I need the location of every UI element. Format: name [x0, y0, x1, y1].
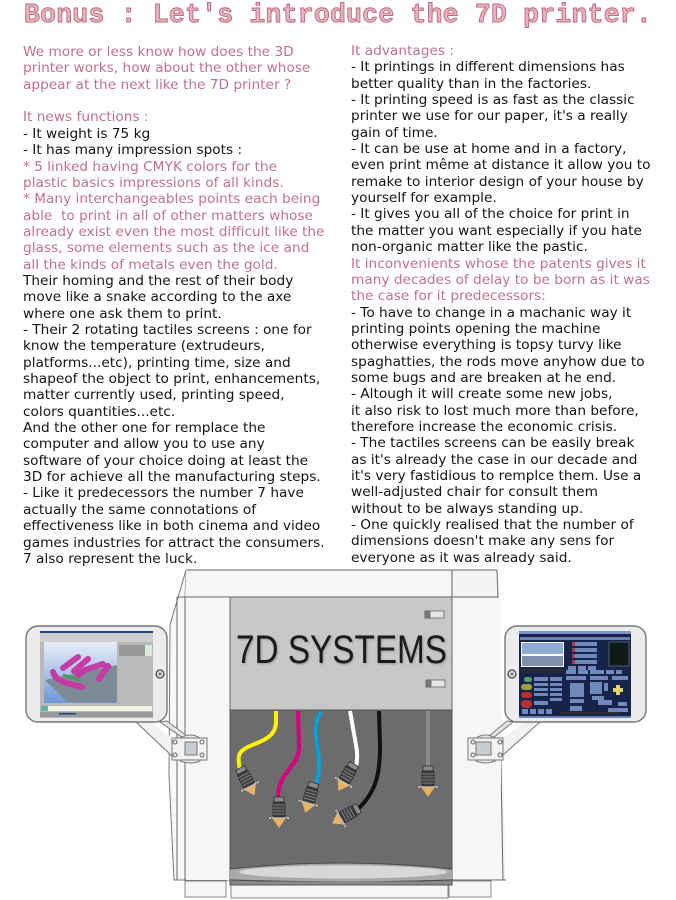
- title: Bonus : Let's introduce the 7D printer.: [24, 0, 652, 30]
- text block: inconvenients list: - To have to change in a machanic way it: [351, 305, 631, 321]
- text block: inconvenients list: it also risk to lost much more than before,: [351, 403, 639, 419]
- text block: inconvenients list: well-adjusted chair for consult them: [351, 484, 598, 500]
- text block: inconvenients list: it's very fastidious to remplce them. Use a: [351, 468, 641, 484]
- right touch screen tablet: [505, 626, 646, 722]
- filament: magenta: [269, 711, 299, 828]
- text block: weight and spots: - It has many impression spots :: [23, 142, 242, 158]
- text block: inconvenients list: [351, 305, 645, 566]
- text block: inconvenients list: - Altough it will create some new jobs,: [351, 386, 612, 402]
- text block: impression spots detail: * 5 linked having CMYK colors for the: [23, 158, 277, 174]
- right arm and bracket: [468, 721, 540, 763]
- text block: impression spots detail: plastic basics impressions of all kinds.: [23, 175, 284, 191]
- printer feet: [185, 881, 491, 898]
- text block: impression spots detail: able to print in all of other matters whose: [23, 208, 313, 224]
- text block: inconvenients list: - One quickly realised that the number of: [351, 517, 634, 533]
- text block: inconvenients list: therefore increase the economic crisis.: [351, 419, 617, 435]
- text block: advantages list: [351, 59, 650, 255]
- text block: functions list: move like a snake according to the axe: [23, 289, 291, 305]
- text block: inconvenients heading: It inconvenients whose the patents gives it: [351, 256, 646, 272]
- text block: advantages list: printer we use for our paper, it's a really: [351, 108, 628, 124]
- text block: functions list: And the other one for remplace the: [23, 420, 265, 436]
- text block: impression spots detail: glass, some elements such as the ice and: [23, 240, 309, 256]
- filament: black: [327, 711, 380, 833]
- text block: advantages list: - It can be use at home and in a factory,: [351, 141, 627, 157]
- text block: intro question: appear at the next like the 7D printer ?: [23, 77, 291, 93]
- text block: advantages list: the matter you want especially if you hate: [351, 223, 642, 239]
- text block: inconvenients list: spaghatties, the rods move anyhow due to: [351, 354, 645, 370]
- filament: cyan: [295, 711, 324, 816]
- panel slots: [425, 611, 445, 687]
- printer body: [169, 570, 506, 898]
- text block: weight and spots: [23, 126, 242, 158]
- text block: functions list: where one ask them to print.: [23, 306, 222, 322]
- text block: inconvenients heading: many decades of delay to be born as it was: [351, 272, 650, 288]
- filament: yellow: [231, 711, 276, 800]
- text block: functions list: - Like it predecessors the number 7 have: [23, 485, 304, 501]
- logo text: 7D SYSTEMS: [236, 628, 447, 672]
- text block: functions list: platforms...etc), printing time, size and: [23, 355, 291, 371]
- text block: functions list: colors quantities...etc.: [23, 404, 175, 420]
- text block: advantages list: - It gives you all of the choice for print in: [351, 206, 630, 222]
- text block: advantages list: - It printings in different dimensions has: [351, 59, 625, 75]
- right screen software: [519, 631, 631, 718]
- text block: functions list: 7 also represent the luck.: [23, 551, 197, 567]
- filament: white: [329, 711, 363, 796]
- logo panel: [230, 597, 452, 711]
- text block: weight and spots: - It weight is 75 kg: [23, 126, 150, 142]
- text block: functions list: effectiveness like in both cinema and video: [23, 518, 320, 534]
- text block: inconvenients list: some bugs and are breaken at he end.: [351, 370, 616, 386]
- text block: functions list: [22, 273, 325, 567]
- text block: advantages list: yourself for example.: [351, 190, 497, 206]
- text block: inconvenients list: without to be always standing up.: [351, 501, 583, 517]
- text block: inconvenients heading: the case for it predecessors:: [351, 288, 546, 304]
- text block: intro question: printer works, how about the other whose: [23, 60, 310, 76]
- left arm and bracket: [136, 721, 207, 763]
- left touch screen tablet: [26, 626, 167, 722]
- text block: functions list: games industries for attract the consumers.: [23, 534, 325, 550]
- text block: advantages list: even print même at distance it allow you to: [351, 157, 650, 173]
- text block: advantages list: - It printing speed is as fast as the classic: [351, 92, 635, 108]
- text block: inconvenients heading: [351, 256, 650, 304]
- text block: inconvenients list: as it's already the case in our decade and: [351, 452, 637, 468]
- text block: advantages list: gain of time.: [351, 125, 438, 141]
- text block: functions list: shapeof the object to print, enhancements,: [23, 371, 320, 387]
- text block: functions list: software of your choice doing at least the: [23, 453, 308, 469]
- text block: functions list: actually the same connotations of: [23, 502, 256, 518]
- text block: impression spots detail: all the kinds of metals even the gold.: [23, 257, 278, 273]
- text block: functions list: - Their 2 rotating tactiles screens : one for: [23, 322, 312, 338]
- text block: advantages list: remake to interior design of your house by: [351, 174, 644, 190]
- text block: functions list: know the temperature (extrudeurs,: [23, 338, 265, 354]
- text block: functions list: computer and allow you to use any: [23, 436, 265, 452]
- text block: inconvenients list: printing points opening the machine: [351, 321, 600, 337]
- text block: impression spots detail: * Many interchangeables points each being: [23, 191, 320, 207]
- text block: impression spots detail: [23, 158, 324, 273]
- left screen software: [40, 631, 153, 718]
- filament: grey: [418, 711, 438, 797]
- text block: functions list: Their homing and the rest of their body: [23, 273, 293, 289]
- text block: inconvenients list: dimensions doesn't make any sens for: [351, 533, 614, 549]
- text block: inconvenients list: everyone as it was already said.: [351, 550, 572, 566]
- text block: inconvenients list: - The tactiles screens can be easily break: [351, 435, 634, 451]
- text block: inconvenients list: otherwise everything is topsy turvy like: [351, 337, 622, 353]
- text block: advantages heading: It advantages :: [351, 43, 454, 59]
- text block: advantages list: non-organic matter like the pastic.: [351, 239, 588, 255]
- text block: intro question: [23, 44, 310, 93]
- text block: intro question: We more or less know how does the 3D: [23, 44, 294, 60]
- text block: impression spots detail: already exist even the most difficult like the: [23, 224, 324, 240]
- text block: news functions heading: It news functions :: [23, 109, 149, 125]
- text block: advantages list: better quality than in the factories.: [351, 76, 591, 92]
- build plate: [230, 863, 452, 884]
- build chamber: [230, 710, 452, 885]
- text block: functions list: 3D for achieve all the manufacturing steps.: [23, 469, 321, 485]
- text block: functions list: matter currently used, printing speed,: [23, 387, 284, 403]
